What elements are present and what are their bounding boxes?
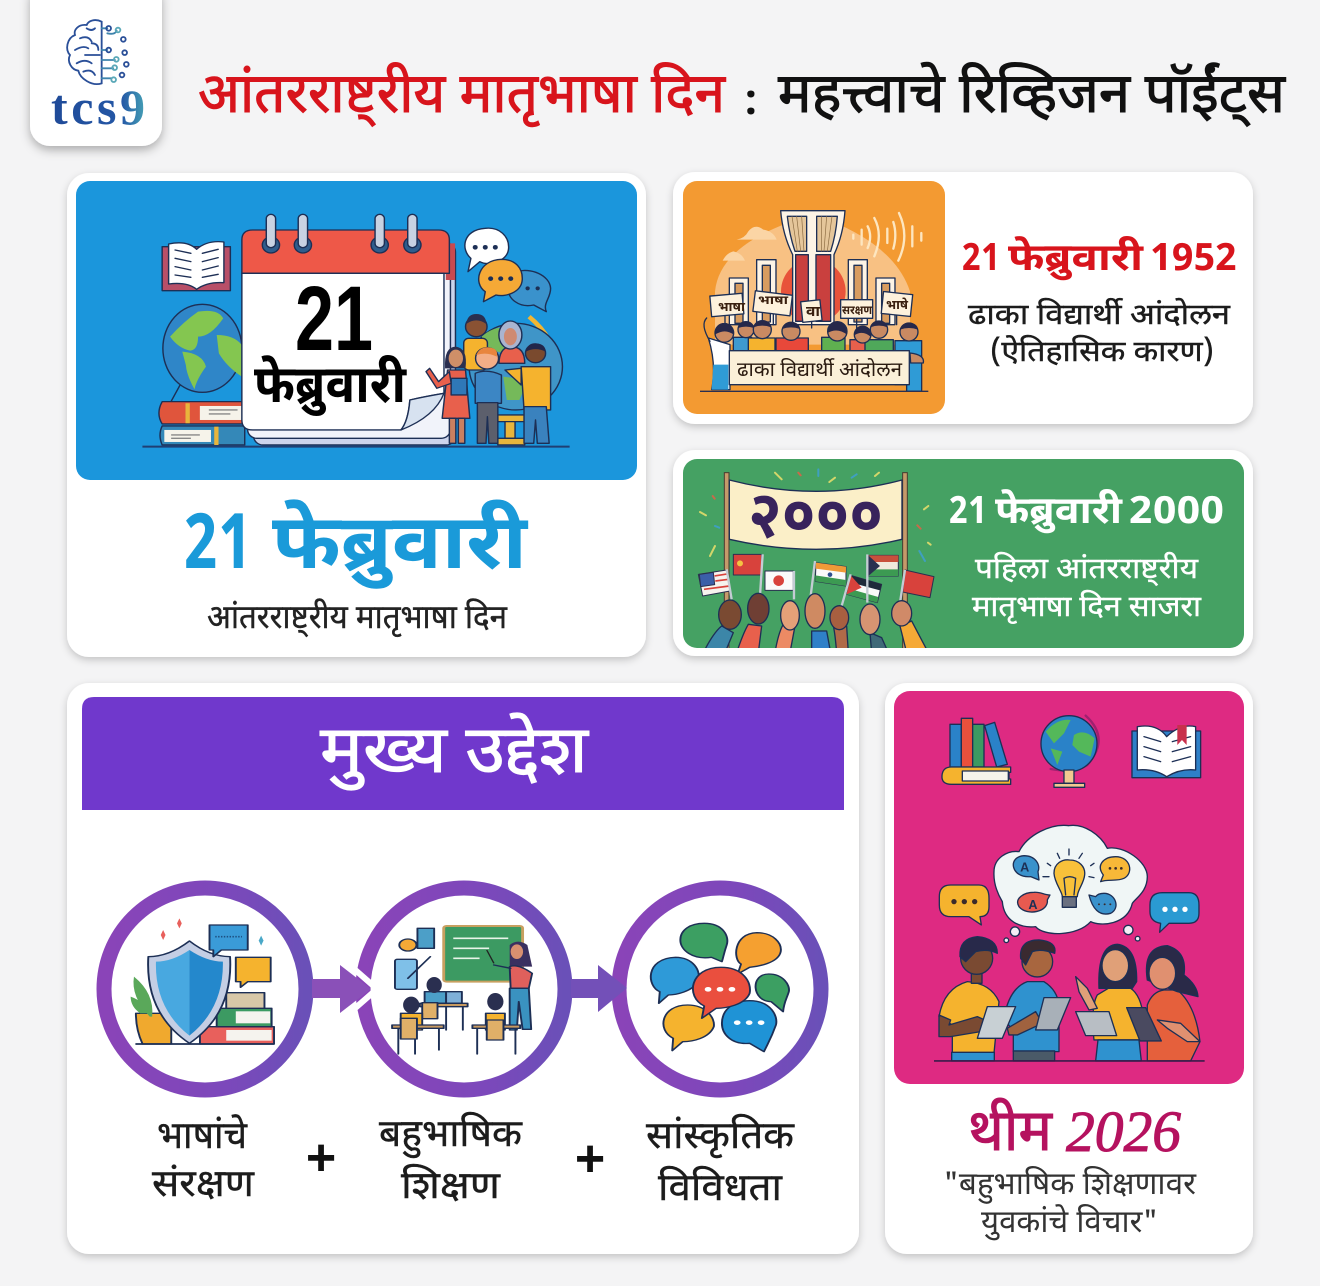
icon: globe — [1041, 716, 1099, 787]
heading: 21 February: 21 — [184, 501, 252, 600]
banner year: २००० — [748, 478, 883, 564]
sub: flags — [698, 554, 934, 606]
heading: 21 February 2000 — [949, 488, 1224, 539]
illustration: Dhaka student movement — [683, 181, 945, 414]
quote line 1: "बहुभाषिक शिक्षणावर — [943, 1166, 1197, 1207]
icon: left globe — [163, 304, 242, 403]
title: black part: महत्त्वाचे रिव्हिजन पॉईंट्स — [778, 62, 1286, 135]
heading: theme 2026: थीम — [968, 1098, 1053, 1174]
heading: 21 February 2000: 2000 — [1129, 489, 1224, 539]
icon: thought cloud — [994, 825, 1147, 943]
heading: 21 February 1952: फेब्रुवारी — [1008, 235, 1144, 286]
panel: 1952 — [673, 172, 1253, 424]
sub: people row — [704, 318, 922, 391]
ground line — [142, 444, 570, 450]
heading: theme 2026: 2026 — [1066, 1099, 1181, 1164]
sub: protest signs — [710, 291, 913, 328]
sign labels: भाषा — [758, 293, 789, 309]
label: language preservation — [152, 1113, 255, 1212]
text: first celebration line 1: पहिला आंतरराष्ट्रीय — [975, 552, 1199, 590]
heading: 21 February 2000: फेब्रुवारी — [995, 488, 1123, 539]
sign labels — [718, 293, 909, 322]
heading: 21 February 1952: 1952 — [1150, 236, 1237, 286]
icon: side bubbles — [939, 885, 1199, 932]
icon: stacked books — [159, 402, 245, 445]
icon: thought cloud: A — [1028, 898, 1038, 912]
heading banner — [82, 697, 844, 810]
illustration: flags and banner — [698, 469, 934, 653]
icon: books — [942, 718, 1011, 784]
plus 2: + — [575, 1130, 605, 1188]
label: language preservation: भाषांचे — [157, 1113, 248, 1164]
title: red part: आंतरराष्ट्रीय मातृभाषा दिन — [198, 63, 726, 135]
sign labels: सरक्षण — [842, 303, 872, 319]
heading: 21 February: फेब्रुवारी — [272, 500, 529, 600]
icon: colourful speech bubbles — [651, 923, 789, 1052]
illustration: youth with ideas — [934, 716, 1205, 1061]
label: cultural diversity — [646, 1113, 795, 1216]
icon: open book — [1132, 725, 1201, 778]
label: cultural diversity: विविधता — [658, 1165, 783, 1216]
flow: three circles — [104, 888, 821, 1090]
sign labels: वा — [806, 303, 821, 322]
icon: shield and books — [131, 918, 275, 1044]
subheading: आंतरराष्ट्रीय मातृभाषा दिन — [207, 598, 508, 642]
icon: group of people with globe — [426, 314, 562, 445]
label: language preservation: संरक्षण — [152, 1162, 255, 1212]
icon: thought cloud: A — [1020, 861, 1029, 875]
text: Dhaka student movement: ढाका विद्यार्थी आंदोलन — [968, 298, 1231, 336]
panel: main objectives — [67, 683, 859, 1254]
heading text: मुख्य उद्देश — [320, 713, 590, 799]
quote line 2: युवकांचे विचार" — [981, 1204, 1158, 1245]
label: cultural diversity: सांस्कृतिक — [646, 1113, 795, 1164]
heading: 21 February — [184, 500, 529, 600]
sub: raised hands — [703, 593, 928, 653]
heading: theme 2026 — [968, 1098, 1181, 1174]
calendar month: फेब्रुवारी — [254, 355, 408, 424]
text: first celebration line 2: मातृभाषा दिन साजरा — [972, 590, 1202, 628]
banner text: ढाका विद्यार्थी आंदोलन — [737, 357, 903, 385]
sign labels: भाषे — [886, 297, 909, 315]
logo wordmark: tcs9 — [51, 79, 145, 135]
heading: 21 February 2000: 21 — [949, 489, 987, 539]
illustration: calendar — [76, 181, 637, 480]
text: historic reason: (ऐतिहासिक कारण) — [990, 335, 1214, 373]
panel: theme 2026 — [885, 683, 1253, 1254]
arrow 2 — [571, 965, 627, 1012]
heading: 21 February 1952 — [962, 235, 1237, 286]
panel: 2000 — [673, 450, 1253, 656]
arrow 1 — [312, 965, 371, 1013]
sub: four students — [939, 937, 1200, 1061]
plus 1: + — [306, 1129, 336, 1187]
icon: classroom — [392, 926, 532, 1054]
cut in ring around arrow 1 — [345, 961, 377, 1017]
label: multilingual education: बहुभाषिक — [379, 1111, 523, 1162]
sign labels: भाषा — [718, 300, 746, 317]
logo card — [30, 0, 162, 146]
heading: 21 February 1952: 21 — [962, 236, 1000, 286]
label: multilingual education: शिक्षण — [401, 1163, 501, 1214]
icon: speech bubbles — [465, 228, 551, 312]
title: colon: : — [744, 77, 758, 132]
calendar number: 21 — [295, 268, 373, 370]
icon: brain circuit — [67, 20, 129, 84]
title — [198, 62, 1286, 135]
icon: calendar pad — [242, 214, 455, 445]
icon: open book — [162, 242, 230, 291]
label: multilingual education — [379, 1111, 523, 1214]
panel: 21 February — [67, 173, 646, 657]
